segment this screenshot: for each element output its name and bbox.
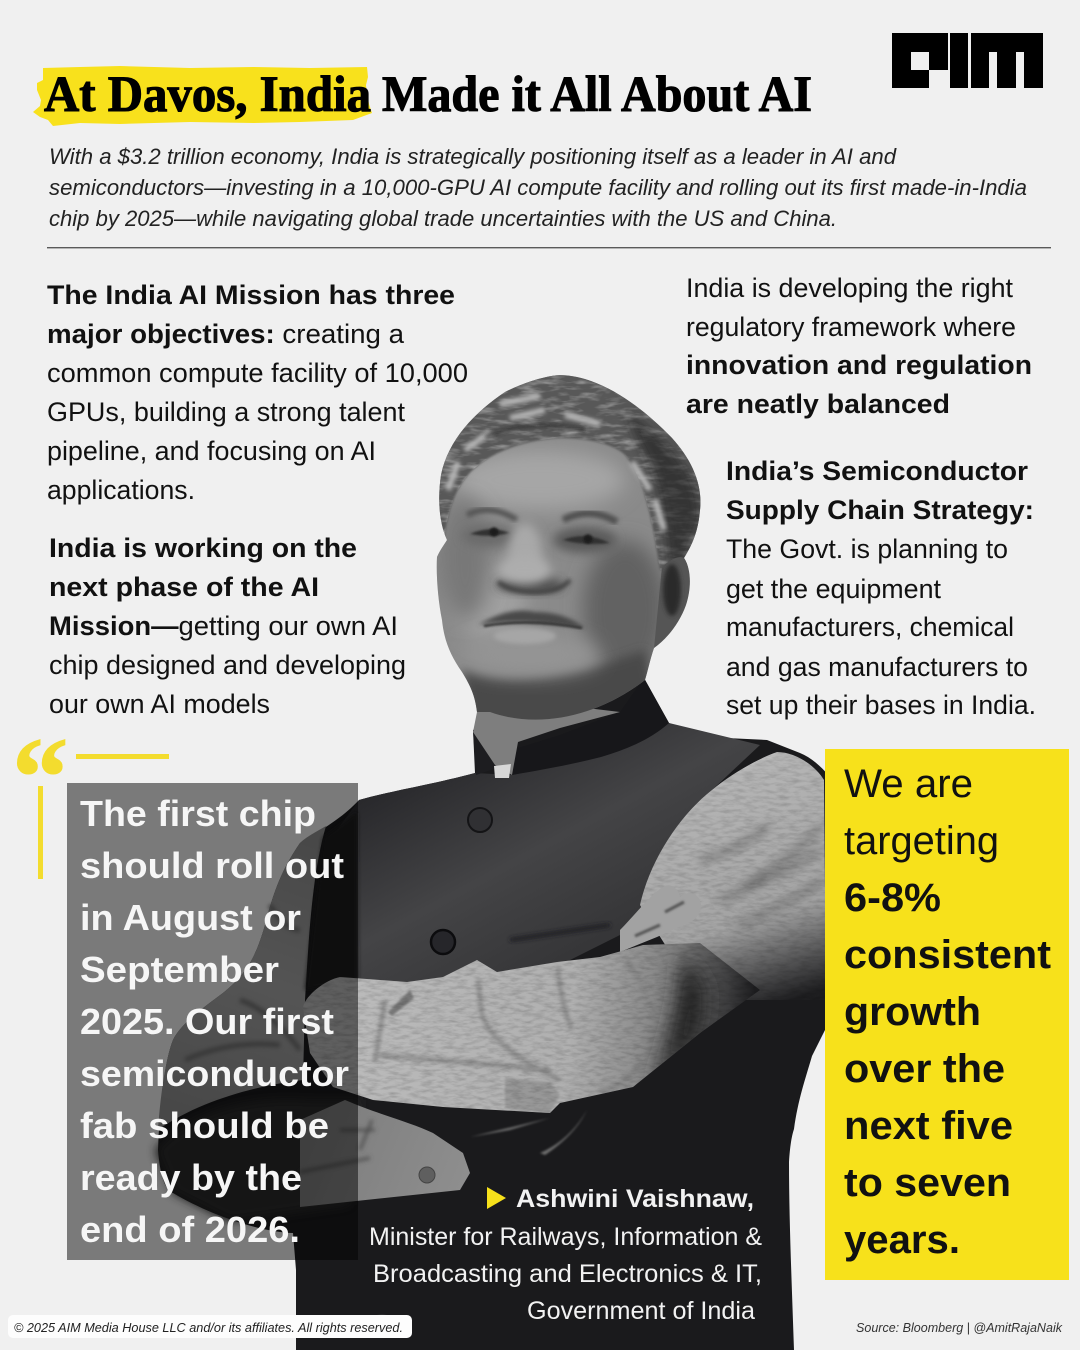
text block: AI Mission objectives: GPUs, building a strong talent — [47, 397, 405, 427]
vest seam — [510, 925, 610, 940]
moustache and mouth — [478, 611, 585, 628]
quote box — [67, 783, 358, 1260]
text block: AI Mission objectives: pipeline, and focusing on AI — [47, 436, 376, 466]
text block: semiconductor supply chain: and gas manufacturers to — [726, 652, 1028, 682]
skin — [436, 375, 700, 712]
under sleeve streaks — [470, 1110, 587, 1155]
vest front — [308, 723, 760, 985]
callout: growth target: next five — [844, 1104, 1013, 1148]
text block: regulatory framework: regulatory framework where — [686, 312, 1016, 342]
left sleeve — [158, 826, 326, 1130]
text block: semiconductor supply chain: The Govt. is planning to — [726, 534, 1008, 564]
ear — [654, 557, 690, 648]
vest shadow left — [305, 812, 358, 990]
callout: growth target: consistent — [844, 933, 1051, 977]
upper arm sleeve — [640, 752, 825, 1000]
callout: growth target — [825, 749, 1069, 1280]
attribution: Government of India — [527, 1297, 755, 1325]
title with yellow brush highlight — [33, 66, 812, 126]
text block: next phase of AI Mission: next phase of the AI — [49, 572, 319, 602]
text block: next phase of AI Mission: chip designed and developing — [49, 650, 406, 680]
heading: At Davos, India — [44, 67, 371, 123]
quote box: 2025. Our first — [80, 1001, 334, 1042]
collar — [512, 678, 669, 775]
attribution: Ashwini Vaishnaw, — [516, 1185, 754, 1213]
quote box: semiconductor — [80, 1053, 349, 1094]
text block: next phase of AI Mission: India is working on the — [49, 533, 357, 563]
subtitle: chip by 2025—while navigating global trade uncertainties with the US and China. — [49, 206, 837, 231]
text block: regulatory framework: India is developing the right — [686, 273, 1013, 303]
subtitle — [49, 144, 1027, 231]
eye shadows — [553, 527, 617, 553]
text block: semiconductor supply chain: India’s Semiconductor — [726, 456, 1029, 486]
lower elbow shadow — [155, 1099, 360, 1222]
callout: growth target: years. — [844, 1218, 960, 1262]
text block: semiconductor supply chain: set up their bases in India. — [726, 690, 1036, 720]
subtitle: semiconductors—investing in a 10,000-GPU AI compute facility and rolling out its first made-in-India — [49, 175, 1027, 200]
text block: regulatory framework: are neatly balanced — [686, 389, 950, 419]
attribution: Broadcasting and Electronics & IT, — [373, 1260, 762, 1288]
callout: growth target: to seven — [844, 1161, 1011, 1205]
quote box: should roll out — [80, 845, 344, 886]
nose — [504, 522, 545, 560]
icon: yellow triangle — [487, 1187, 506, 1209]
brows — [467, 510, 517, 520]
lower forearm cuff — [300, 1100, 470, 1207]
callout: growth target: 6-8% — [844, 876, 941, 920]
callout: growth target: targeting — [844, 819, 999, 863]
callout: growth target: We are — [844, 762, 973, 806]
callout: growth target: growth — [844, 990, 981, 1034]
portrait: Ashwini Vaishnaw — [155, 370, 830, 1350]
text block: AI Mission objectives: applications. — [47, 475, 195, 505]
source credit: Source: Bloomberg | @AmitRajaNaik — [856, 1321, 1063, 1335]
text block: semiconductor supply chain: get the equipment — [726, 574, 941, 604]
text block: AI Mission objectives: The India AI Mission has three — [47, 280, 455, 310]
quote box: ready by the — [80, 1157, 302, 1198]
text block: next phase of AI Mission — [49, 533, 406, 719]
heading — [44, 67, 812, 123]
text block: semiconductor supply chain: manufacturers, chemical — [726, 612, 1014, 642]
heading: Made it All About AI — [382, 67, 812, 123]
logo: AIM — [892, 33, 1043, 88]
quote box: end of 2026. — [80, 1209, 300, 1250]
quote ornament — [12, 715, 169, 879]
forearm sleeve — [295, 940, 765, 1120]
eyes — [470, 529, 510, 536]
hair — [430, 370, 710, 570]
text block: AI Mission objectives: common compute facility of 10,000 — [47, 358, 468, 388]
attribution — [369, 1185, 762, 1325]
buttons — [468, 808, 492, 832]
text block: regulatory framework — [686, 273, 1032, 419]
hand — [620, 885, 701, 952]
icon: yellow brush stroke — [33, 66, 372, 126]
callout: growth target: over the — [844, 1047, 1005, 1091]
quote box: fab should be — [80, 1105, 329, 1146]
quote box: in August or — [80, 897, 301, 938]
copyright note — [8, 1315, 412, 1338]
text block: regulatory framework: innovation and regulation — [686, 350, 1032, 380]
icon: quotation mark: “ — [12, 715, 68, 840]
head — [430, 370, 710, 730]
quote box: September — [80, 949, 279, 990]
text block: next phase of AI Mission: Mission—getting our own AI — [49, 611, 398, 641]
text block: AI Mission objectives: major objectives: creating a — [47, 319, 405, 349]
text block: semiconductor supply chain: Supply Chain Strategy: — [726, 495, 1034, 525]
text block: AI Mission objectives — [47, 280, 468, 505]
text block: semiconductor supply chain — [726, 456, 1036, 720]
attribution: Minister for Railways, Information & — [369, 1223, 762, 1251]
quote box: The first chip — [80, 793, 316, 834]
copyright note: © 2025 AIM Media House LLC and/or its affiliates. All rights reserved. — [14, 1320, 403, 1335]
torso silhouette — [158, 678, 830, 1350]
neck and shirt — [473, 700, 620, 775]
subtitle: With a $3.2 trillion economy, India is strategically positioning itself as a leader in AI and — [49, 144, 897, 169]
text block: next phase of AI Mission: our own AI models — [49, 689, 270, 719]
